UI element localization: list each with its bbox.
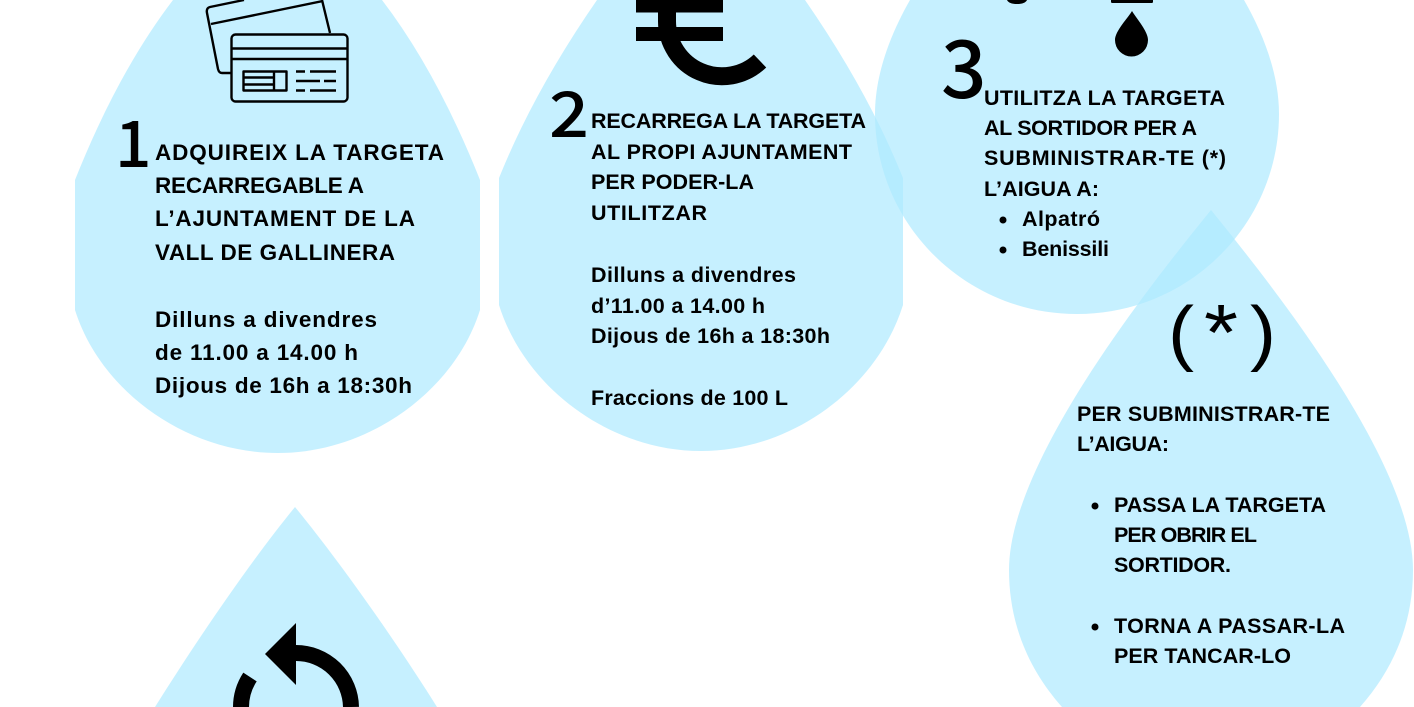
footnote symbol: ) [1250,293,1276,373]
step 1 instructions [155,140,444,398]
step 3 instructions: Alpatró [1022,207,1100,231]
panel: step 3 [875,0,1279,314]
drop shape 3 [875,0,1279,314]
step 3 instructions: L’AIGUA A: [984,177,1099,201]
panel: footnote [1009,210,1413,707]
step 1 instructions: VALL DE GALLINERA [155,240,395,265]
step 3 instructions [984,86,1226,261]
footnote instructions: PER TANCAR-LO [1114,644,1291,668]
footnote instructions: PASSA LA TARGETA [1114,493,1326,517]
step 1 instructions: Dijous de 16h a 18:30h [155,373,412,398]
icon: euro sign [636,0,760,76]
footnote instructions: TORNA A PASSAR-LA [1114,614,1345,638]
step 2 instructions: Dilluns a divendres [591,263,796,287]
footnote instructions: SORTIDOR. [1114,553,1231,577]
drop shape 2 [499,0,903,451]
step 2 instructions: AL PROPI AJUNTAMENT [591,140,852,164]
footnote symbol [1168,288,1276,377]
step 3 instructions: Benissili [1022,237,1109,261]
step 1 instructions: de 11.00 a 14.00 h [155,340,358,365]
footnote symbol: ( [1168,293,1194,373]
footnote instructions: PER SUBMINISTRAR-TE [1077,402,1330,426]
step 1 instructions: ADQUIREIX LA TARGETA [155,140,444,165]
step 2 instructions: UTILITZAR [591,201,707,225]
footnote symbol: * [1204,288,1238,377]
step 2 instructions: PER PODER-LA [591,170,754,194]
drop shape 1 [75,0,480,453]
drop shape 5 [155,507,437,707]
step number 2: 2 [549,65,589,156]
step 2 instructions: Fraccions de 100 L [591,386,788,410]
step 2 instructions: Dijous de 16h a 18:30h [591,324,830,348]
step number 3: 3 [941,6,987,122]
drop shape 4 [1009,210,1413,707]
footnote instructions: L’AIGUA: [1077,432,1169,456]
step 3 instructions: AL SORTIDOR PER A [984,116,1197,140]
icon: water tap and droplet [1007,0,1153,56]
panel: step 2 [499,0,903,451]
step 1 instructions: L’AJUNTAMENT DE LA [155,206,415,231]
panel: step 1 [75,0,480,453]
footnote instructions [1077,402,1345,668]
step 1 instructions: Dilluns a divendres [155,307,377,332]
step 1 instructions: RECARREGABLE A [155,173,364,198]
footnote instructions: PER OBRIR EL [1114,523,1257,547]
step 3 instructions: SUBMINISTRAR-TE (*) [984,146,1226,170]
step 3 instructions: UTILITZA LA TARGETA [984,86,1225,110]
panel: step 4 [155,507,437,707]
step 2 instructions: d’11.00 a 14.00 h [591,294,765,318]
step 2 instructions: RECARREGA LA TARGETA [591,109,866,133]
step number 1: 1 [115,94,151,186]
icon: refresh arrow [241,623,351,707]
step 2 instructions [591,109,866,410]
icon: bank cards [207,0,348,102]
